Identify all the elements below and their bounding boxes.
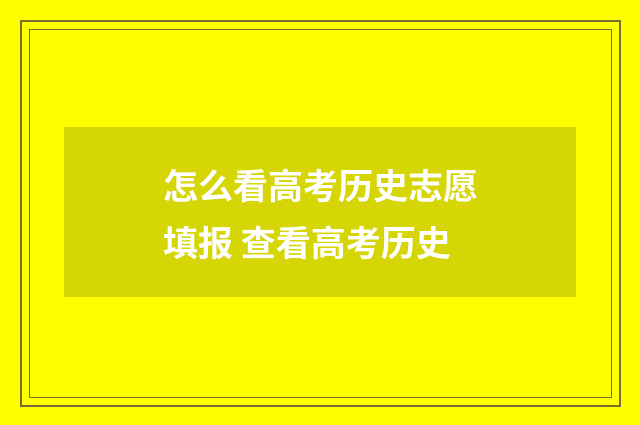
title panel: [64, 127, 576, 297]
inner frame: [29, 29, 612, 398]
title line 2: 填报 查看高考历史: [163, 225, 451, 264]
title line 1: 怎么看高考历史志愿: [163, 168, 478, 207]
title text: [163, 168, 478, 264]
